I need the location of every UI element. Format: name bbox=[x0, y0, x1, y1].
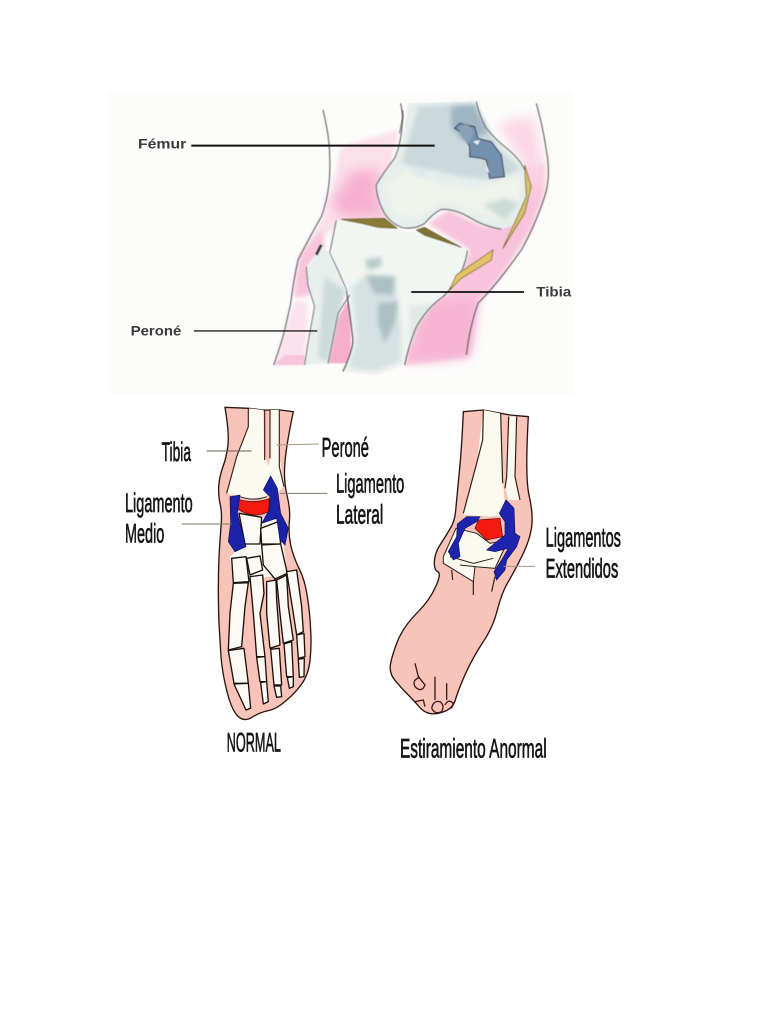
foot outline bbox=[218, 407, 311, 720]
soft tissue bbox=[274, 117, 545, 365]
label: Ligamento Medio: Ligamento bbox=[125, 488, 193, 518]
red cartilage bbox=[475, 518, 503, 540]
femur bbox=[376, 102, 528, 229]
label: Tibia: Tibia bbox=[536, 284, 572, 300]
panel: abnormal stretch ankle bbox=[390, 410, 621, 763]
foot outline bbox=[390, 410, 532, 714]
tibia bbox=[330, 221, 468, 375]
label: Fémur: Fémur bbox=[138, 136, 187, 152]
label: Ligamento Medio: Medio bbox=[125, 519, 164, 549]
panel: normal ankle: NORMAL bbox=[227, 728, 281, 758]
fibula bbox=[305, 245, 350, 365]
panel: knee anatomy bbox=[108, 91, 574, 394]
label: Peroné: Peroné bbox=[322, 433, 369, 463]
label: Estiramiento Anormal: Estiramiento Anormal bbox=[400, 733, 547, 763]
label: Peroné: Peroné bbox=[131, 322, 182, 338]
label: Ligamentos Extendidos bbox=[503, 523, 621, 583]
label: Peroné bbox=[277, 433, 369, 463]
label: Ligamentos Extendidos: Extendidos bbox=[546, 553, 618, 583]
blue ligaments bbox=[448, 500, 520, 580]
label: Tibia bbox=[162, 437, 252, 467]
label: Ligamento Lateral: Lateral bbox=[336, 499, 383, 529]
leg bones bbox=[463, 410, 520, 517]
limb contours bbox=[274, 103, 548, 365]
leg bones bbox=[227, 408, 284, 499]
label: Ligamento Medio bbox=[125, 488, 232, 549]
foot bones bbox=[228, 513, 305, 710]
ankle bones bbox=[443, 528, 508, 595]
cartilage and tendon bbox=[341, 165, 531, 290]
panel: normal ankle bbox=[125, 407, 404, 758]
label: Ligamento Lateral: Ligamento bbox=[336, 468, 404, 498]
label: Ligamento Lateral bbox=[280, 468, 404, 529]
label: Tibia: Tibia bbox=[162, 437, 191, 467]
toes bbox=[414, 663, 453, 713]
label: Ligamentos Extendidos: Ligamentos bbox=[546, 523, 621, 553]
red cartilage bbox=[238, 499, 269, 515]
blue ligaments bbox=[228, 476, 288, 552]
